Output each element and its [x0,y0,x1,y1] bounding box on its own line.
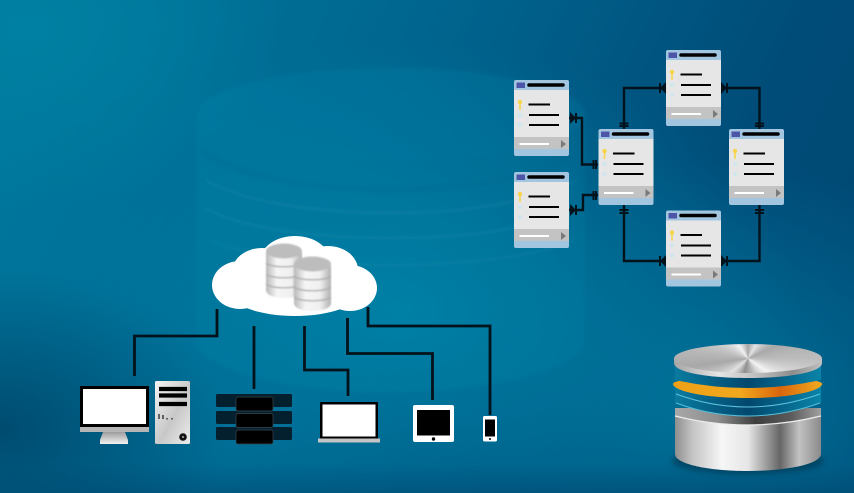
icon: tower computer [155,381,190,444]
cloud shape [212,236,377,316]
blue layer highlight [676,403,820,416]
table: top [666,50,721,126]
middle layer highlight [676,394,820,407]
cylinder top shading [675,408,821,425]
orange layer [673,378,822,398]
icon: server rack [216,394,292,444]
cylinder highlight [675,416,821,425]
faint background database [197,68,585,392]
table: left lower [514,172,569,248]
top disc surface [674,344,822,373]
icon: cloud with databases [212,236,377,316]
database right [294,256,331,311]
middle blue layer [675,384,821,407]
icon: laptop [318,402,380,442]
icon: large database [672,344,824,474]
database left [266,244,302,298]
lower cylinder [675,408,821,471]
top disc rim [674,358,822,378]
cloud connector lines [134,307,490,415]
table: right [729,129,784,205]
icon: tablet [413,405,454,442]
blue layers [675,392,821,416]
table: left upper [514,80,569,156]
icon: phone [483,416,497,442]
icon: desktop monitor [80,386,149,444]
table: centre [598,129,654,205]
connector lines between tables [569,82,764,267]
upper blue layer [675,366,821,388]
table: bottom [666,210,721,286]
shadow [672,448,824,474]
